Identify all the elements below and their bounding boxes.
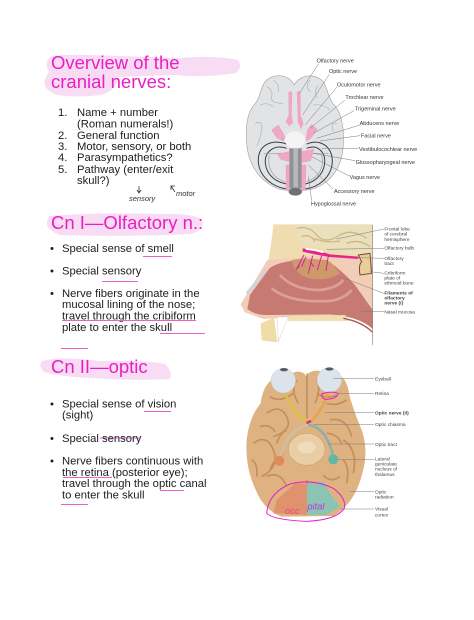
nerve labels: Oculomotor nerve — [337, 82, 381, 88]
bullets: optic nerve facts: • — [50, 398, 54, 410]
optic pathway — [280, 395, 333, 457]
numbered list of study points: Pathway (enter/exit — [77, 164, 174, 176]
leader lines — [299, 64, 360, 201]
numbered list of study points: 3. — [58, 141, 67, 153]
nasal labels: Frontal lobe — [384, 226, 410, 232]
nerve labels: Facial nerve — [361, 133, 391, 139]
nerve labels: Trigeminal nerve — [355, 107, 396, 113]
nasal labels: ethmoid bone — [384, 281, 414, 287]
nasal labels: Filaments of — [384, 290, 413, 296]
gyri folds — [252, 380, 355, 487]
nerve labels: Accessory nerve — [334, 189, 375, 195]
bullets: optic nerve facts: the retina (posterior eye); — [62, 467, 188, 479]
brain body — [246, 371, 365, 517]
nerve labels: Glossopharyngeal nerve — [356, 160, 415, 166]
handwritten notes: sensory and motor: sensory — [129, 194, 157, 203]
numbered list of study points: 5. — [58, 164, 67, 176]
bullets: olfactory nerve facts — [50, 243, 205, 348]
nerve labels: Vestibulocochlear nerve — [359, 147, 417, 153]
bullets: olfactory nerve facts: • — [50, 243, 54, 255]
eyeballs — [271, 367, 342, 393]
heading: Overview of the cranial nerves: Overview of the — [51, 52, 180, 73]
numbered list of study points — [58, 107, 191, 187]
bullets: olfactory nerve facts: mucosal lining of the nose; — [62, 299, 195, 311]
lower nose cartilage — [261, 315, 373, 342]
optic labels: cortex — [375, 512, 389, 518]
nasal labels — [384, 226, 415, 315]
numbered list of study points: 4. — [58, 152, 67, 164]
bullets: olfactory nerve facts: • — [50, 266, 54, 278]
nerve labels: Abducens nerve — [360, 121, 399, 127]
brainstem — [285, 131, 305, 196]
numbered list of study points: (Roman numerals!) — [77, 118, 174, 130]
leader lines — [327, 229, 384, 312]
numbered list of study points: General function — [77, 130, 160, 142]
heading: Overview of the cranial nerves — [45, 52, 240, 96]
optic labels: nucleus of — [375, 467, 398, 473]
bullets: optic nerve facts: travel through the optic canal — [62, 478, 206, 490]
handwritten annotations: retina and occipital: occ — [285, 506, 300, 516]
outer nose and bone — [267, 224, 373, 272]
optic labels: thalamus — [375, 472, 395, 478]
nerve labels — [311, 58, 417, 208]
bullets: optic nerve facts: • — [50, 456, 54, 468]
nasal labels: olfactory — [384, 295, 405, 301]
brainstem centre — [288, 433, 325, 465]
lateral geniculate nuclei — [274, 456, 284, 466]
nerve labels: Hypoglossal nerve — [311, 202, 356, 208]
pink cranial nerves — [272, 91, 317, 191]
nerve labels: Olfactory nerve — [317, 58, 354, 64]
bullets: olfactory nerve facts: • — [50, 288, 54, 300]
diagram: brain with optic pathway — [246, 367, 409, 521]
turbinates — [272, 275, 352, 301]
nasal mucosa — [247, 260, 373, 329]
handwritten annotations: retina and occipital: pital — [306, 501, 325, 511]
handwritten notes: sensory and motor — [129, 186, 196, 203]
optic labels: Retina — [375, 391, 389, 397]
nasal labels: plate of — [384, 275, 401, 281]
cerebellum arcs — [258, 142, 332, 189]
nasal labels: Olfactory bulb — [384, 246, 414, 252]
bullets: optic nerve facts: (sight) — [62, 410, 94, 422]
optic labels: Optic — [375, 489, 387, 495]
olfactory bulb and tract — [303, 248, 358, 259]
bullets: olfactory nerve facts: Special sensory — [62, 266, 142, 278]
bullets: olfactory nerve facts: plate to enter the skull — [62, 322, 172, 334]
nasal labels: nerve (I) — [384, 301, 403, 307]
bullets: olfactory nerve facts: Special sense of smell — [62, 243, 174, 255]
numbered list of study points: Name + number — [77, 107, 158, 119]
optic labels: geniculate — [375, 461, 397, 467]
olfactory nerve filaments — [296, 255, 328, 273]
heading: Cn I Olfactory: Cn I—Olfactory n.: — [51, 212, 203, 233]
brain outline — [246, 76, 343, 191]
diagram: nasal cavity with olfactory nerve — [241, 224, 415, 345]
visual cortex colours — [307, 482, 340, 515]
bullets: olfactory nerve facts: travel through the cribiform — [62, 310, 196, 322]
nerve labels: Vagus nerve — [350, 175, 380, 181]
heading: Cn II optic — [40, 356, 171, 380]
frontal lobe — [293, 224, 373, 256]
optic labels: Visual — [375, 507, 388, 513]
vertical rule — [372, 225, 374, 345]
optic labels: radiation — [375, 495, 394, 501]
leader lines — [313, 379, 374, 509]
nerve labels: Optic nerve — [329, 69, 357, 75]
cribriform plate bone — [358, 253, 372, 275]
nasal labels: Olfactory — [384, 256, 404, 262]
optic labels — [375, 376, 409, 518]
bullets: optic nerve facts: Nerve fibers continuous with — [62, 456, 203, 468]
heading: Overview of the cranial nerves: cranial nerves: — [51, 71, 171, 92]
nasal labels: tract — [384, 261, 394, 267]
numbered list of study points: 1. — [58, 107, 67, 119]
numbered list of study points: Parasympathetics? — [77, 152, 173, 164]
handwritten annotations: retina and occipital — [267, 392, 345, 521]
bullets: optic nerve facts: Special sense of vision — [62, 398, 176, 410]
bullets: optic nerve facts: • — [50, 433, 54, 445]
nasal labels: of cerebral — [384, 232, 407, 238]
diagram: brain underside with cranial nerves — [246, 58, 417, 208]
bullets: olfactory nerve facts: Nerve fibers originate in the — [62, 288, 200, 300]
bullets: optic nerve facts: Special sensory — [62, 433, 142, 445]
numbered list of study points: 2. — [58, 130, 67, 142]
nasal labels: Cribriform — [384, 270, 406, 276]
numbered list of study points: skull?) — [77, 175, 110, 187]
bullets: optic nerve facts — [50, 398, 206, 504]
optic labels: Optic nerve (II) — [375, 410, 409, 416]
skin edge — [247, 270, 267, 293]
temporal lobe folds — [255, 80, 337, 147]
nasal labels: hemisphere — [384, 237, 410, 243]
nerve labels: Trochlear nerve — [345, 95, 384, 101]
numbered list of study points: Motor, sensory, or both — [77, 141, 191, 153]
nasal labels: Nasal mucosa — [384, 309, 415, 315]
optic labels: Eyeball — [375, 376, 391, 382]
optic labels: Lateral — [375, 456, 390, 462]
handwritten notes: sensory and motor: motor — [176, 189, 196, 198]
optic labels: Optic tract — [375, 442, 398, 448]
bullets: optic nerve facts: to enter the skull — [62, 490, 145, 502]
optic labels: Optic chiasma — [375, 422, 406, 428]
heading: Cn II optic: Cn II—optic — [51, 356, 148, 377]
